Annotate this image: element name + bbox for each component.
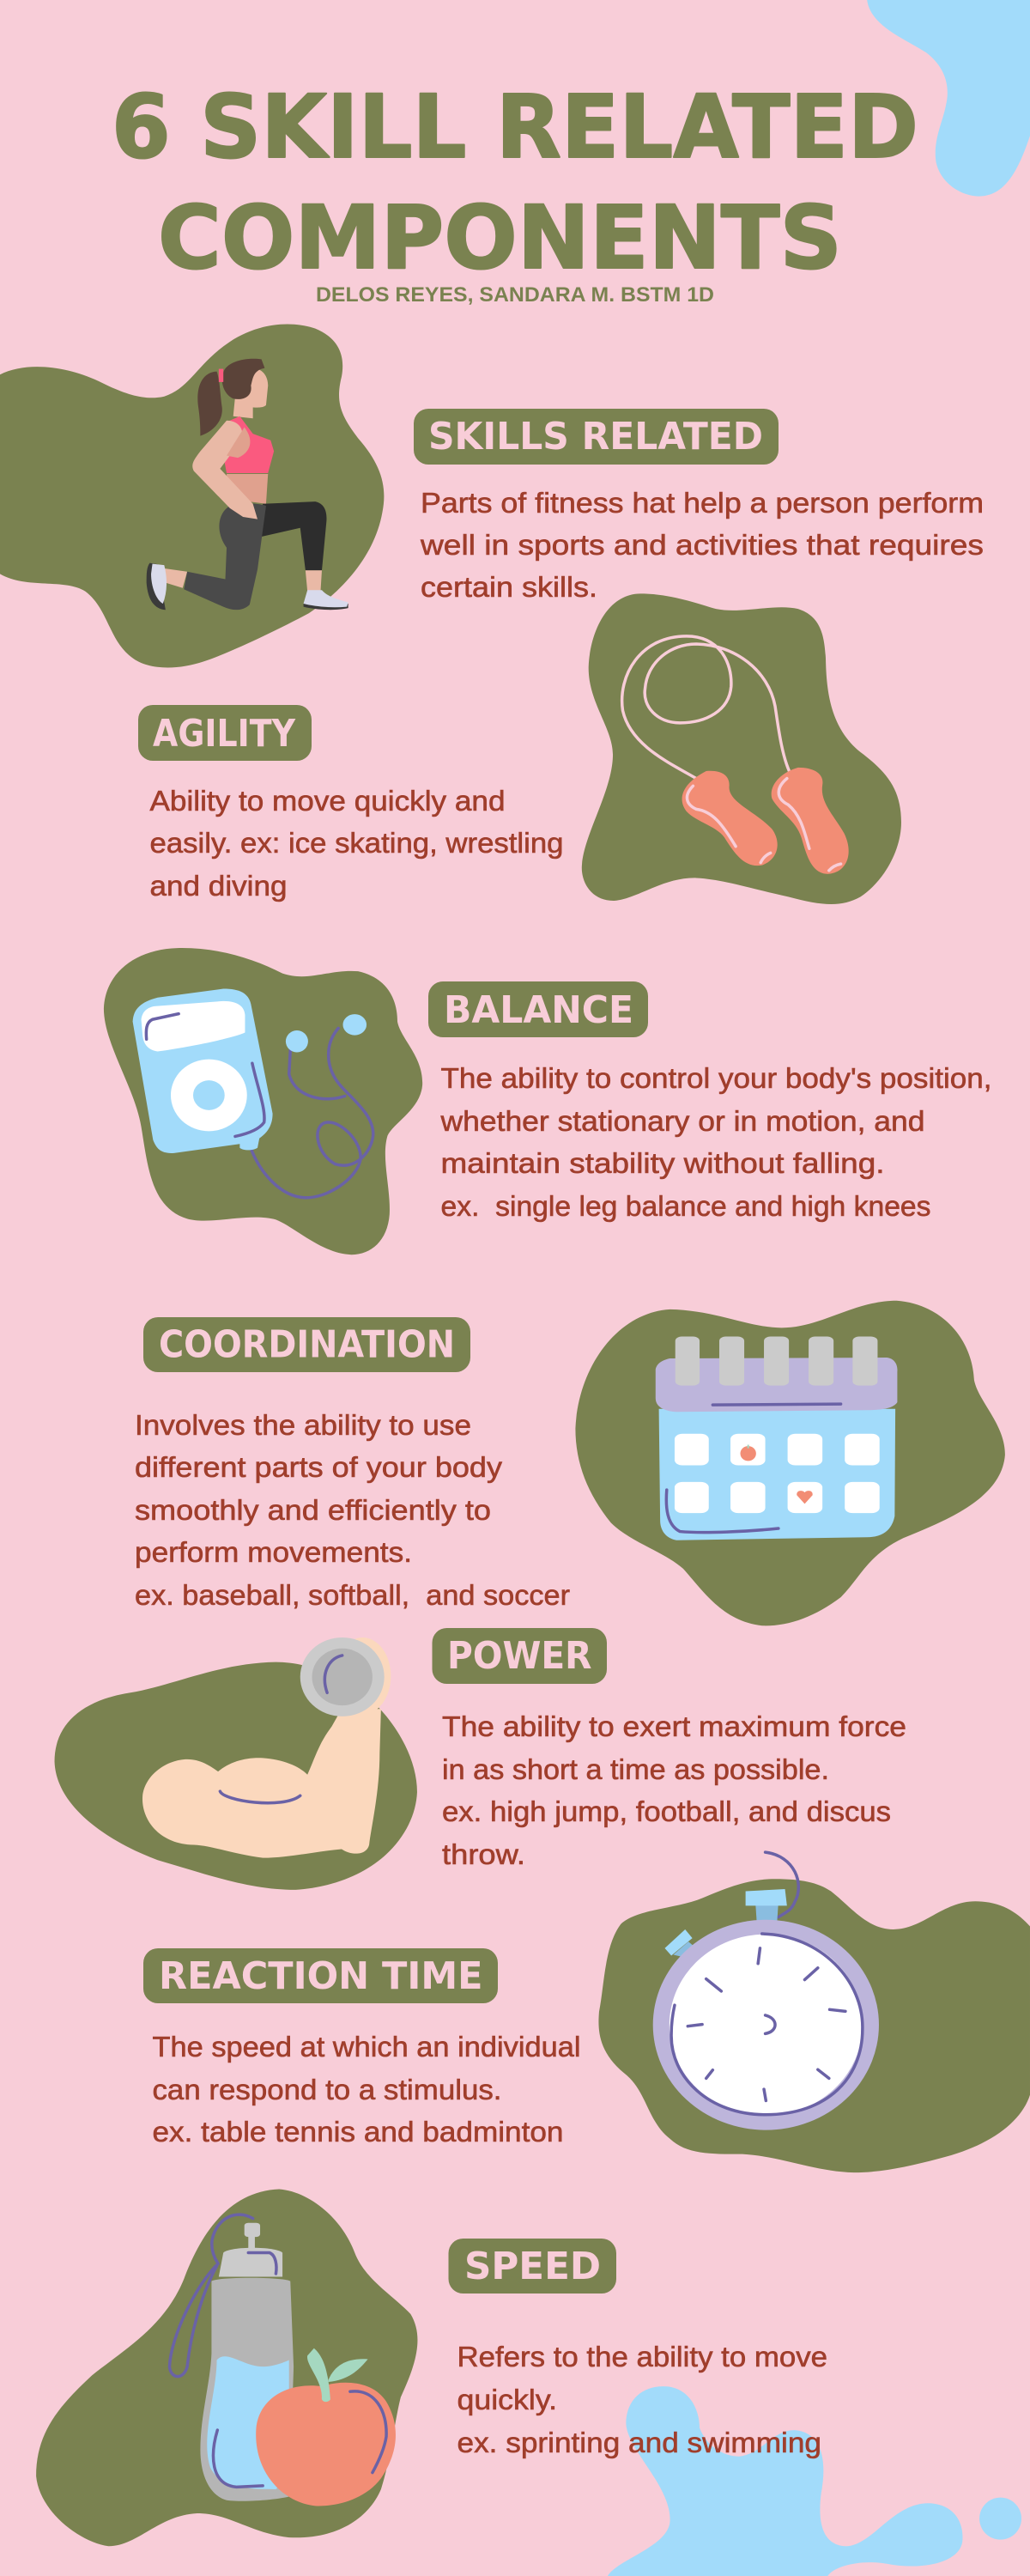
illustration: music player on green blob <box>104 948 422 1255</box>
text: agility: easily. ex: ice skating, wrestling <box>149 827 563 859</box>
text: agility <box>149 785 563 902</box>
text: balance: whether stationary or in motion, and <box>439 1105 925 1137</box>
text: reaction time: ex. table tennis and badminton <box>153 2116 563 2148</box>
text: coordination: ex. baseball, softball, and soccer <box>135 1579 570 1611</box>
text: power: The ability to exert maximum force <box>442 1710 906 1742</box>
text: agility: Ability to move quickly and <box>149 785 505 817</box>
text: skills related: certain skills. <box>421 571 597 603</box>
illustration: flexed arm with dumbbell on green blob <box>55 1637 417 1890</box>
text: coordination: Involves the ability to use <box>135 1409 471 1441</box>
illustration: stopwatch on green blob <box>598 1852 1030 2172</box>
text: reaction time: can respond to a stimulus. <box>153 2074 501 2105</box>
blob: top right water <box>867 0 1030 197</box>
title <box>112 76 918 289</box>
title: 6 SKILL RELATED <box>112 76 918 179</box>
text: power: throw. <box>442 1838 525 1870</box>
text: power: ex. high jump, football, and discus <box>442 1795 891 1827</box>
text: coordination: smoothly and efficiently to <box>135 1494 491 1526</box>
text: coordination: different parts of your body <box>135 1451 503 1483</box>
text: coordination: perform movements. <box>135 1536 412 1568</box>
text: agility: and diving <box>149 870 287 902</box>
illustration: calendar on green blob <box>575 1301 1005 1625</box>
pill: agility <box>138 705 312 761</box>
text: reaction time: The speed at which an individual <box>153 2031 580 2063</box>
text: coordination <box>135 1409 570 1611</box>
pill: reaction time: REACTION TIME <box>159 1954 482 1998</box>
pill: speed: SPEED <box>464 2245 601 2288</box>
text: speed: Refers to the ability to move <box>457 2341 827 2372</box>
text: skills related: well in sports and activities that requires <box>420 529 984 561</box>
pill: power: POWER <box>447 1634 592 1678</box>
author line: DELOS REYES, SANDARA M. BSTM 1D <box>316 283 714 307</box>
illustration: water bottle and apple on green blob <box>36 2189 417 2546</box>
title: COMPONENTS <box>158 187 842 289</box>
text: balance: The ability to control your body's position, <box>441 1062 992 1094</box>
text: balance: ex. single leg balance and high knees <box>441 1190 930 1222</box>
text: power <box>442 1710 906 1870</box>
text: balance <box>439 1062 992 1222</box>
pill: coordination: COORDINATION <box>159 1322 455 1367</box>
illustration: jump rope on green blob <box>582 593 901 904</box>
text: speed <box>457 2341 827 2458</box>
text: reaction time <box>153 2031 580 2148</box>
text: skills related: Parts of fitness hat help a person perform <box>421 487 984 519</box>
text: balance: maintain stability without falling. <box>441 1147 884 1179</box>
pill: balance: BALANCE <box>444 988 633 1032</box>
text: power: in as short a time as possible. <box>442 1753 829 1785</box>
text: skills related <box>420 487 984 603</box>
pill: agility: AGILITY <box>153 712 296 756</box>
blob: bottom right water <box>608 2386 1021 2576</box>
pill: speed <box>448 2239 616 2293</box>
text: speed: quickly. <box>457 2384 557 2415</box>
illustration: woman lunging on green blob <box>0 325 384 668</box>
text: speed: ex. sprinting and swimming <box>457 2427 821 2458</box>
pill: skills related: SKILLS RELATED <box>428 415 763 459</box>
